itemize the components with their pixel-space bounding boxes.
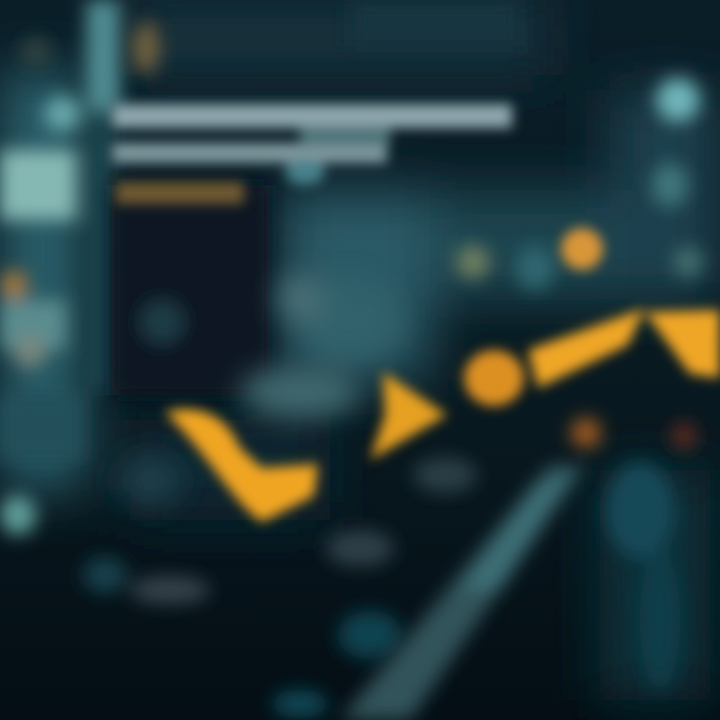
dark panel [112,185,270,395]
segment: check mark [165,409,318,522]
red-orange small lights [571,418,697,449]
segment: arrow [370,372,447,460]
segment: middle [464,350,524,406]
mid cluster [118,274,400,506]
left city blocks [0,0,120,535]
top dim lights [22,0,520,74]
right-side lights [456,78,703,290]
title text smear [112,104,512,185]
orange light dot [561,228,603,270]
road streak [340,465,585,720]
subtitle amber smear [116,182,244,204]
segment: upper ridge [528,308,645,388]
amber line chart [165,308,720,522]
segment: right peak [645,310,720,378]
grey bottom smudges [83,457,680,718]
